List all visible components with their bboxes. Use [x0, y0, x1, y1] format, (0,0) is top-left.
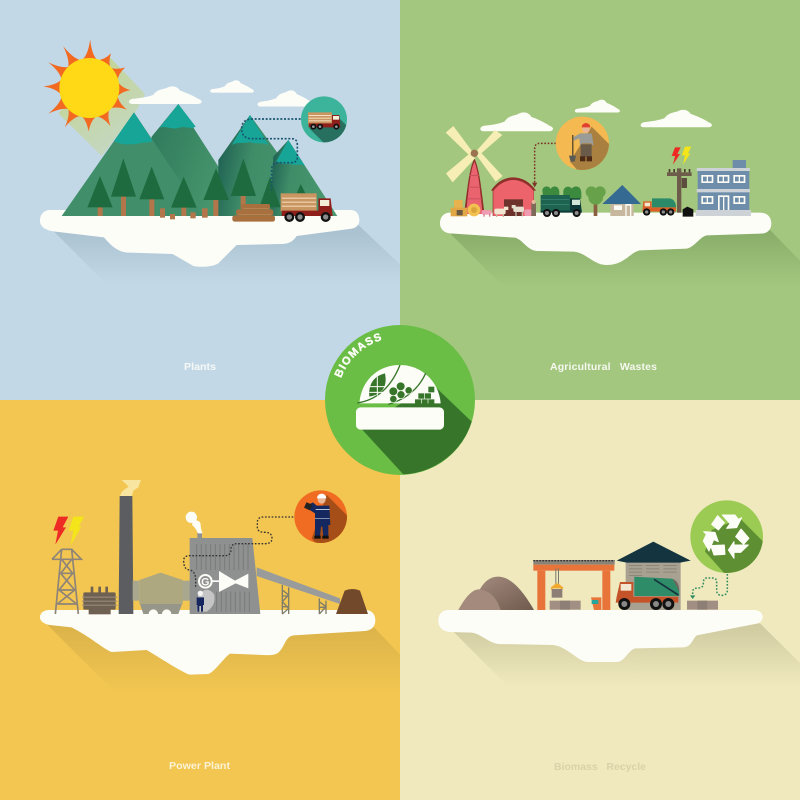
sun: [43, 39, 131, 132]
icon: farmer badge: [556, 116, 609, 170]
island: biomass recycle: [438, 610, 763, 662]
mountain range: [62, 104, 337, 216]
forest trees: [87, 158, 305, 219]
label: power plant: Power Plant: [169, 760, 230, 772]
log truck: [281, 193, 333, 222]
island: plants: [40, 210, 359, 267]
panel: power plant: [0, 400, 400, 800]
island shadow: power plant: [47, 624, 530, 790]
icon: worker badge: [294, 490, 347, 543]
icon: truck badge: [301, 96, 347, 142]
clouds: plants: [129, 80, 314, 106]
dotted route: recycle: [693, 574, 727, 595]
transformer: [82, 587, 117, 614]
panel background: power plant: [0, 400, 400, 800]
sun shadow: [58, 57, 145, 156]
dotted route: agricultural wastes: [535, 143, 556, 184]
island: agricultural wastes: [440, 213, 771, 265]
island: power plant: [40, 610, 375, 675]
small worker: [197, 591, 204, 612]
center badge: biomass: [325, 325, 475, 475]
panel background: biomass recycle: [400, 400, 800, 800]
hay and wheel: [451, 200, 480, 216]
chimney with smoke: [119, 480, 141, 614]
panel: biomass recycle: [400, 400, 800, 800]
label: biomass recycle: Biomass Recycle: [554, 761, 646, 773]
boiler unit: [133, 573, 190, 614]
garbage truck: [642, 198, 676, 216]
dotted route: plants: [242, 119, 301, 192]
conveyor belt: [257, 567, 340, 614]
utility pole: [667, 168, 692, 213]
stacked blocks: [550, 601, 581, 610]
badge dome icon: [356, 365, 444, 430]
generator and turbine: G: [201, 576, 209, 588]
panel: agricultural wastes: [400, 0, 800, 400]
log pile: [232, 204, 275, 222]
green cargo truck: [541, 195, 582, 217]
biomass fuel heap: [336, 589, 368, 614]
icon: route arrowhead: [690, 595, 695, 599]
panel: plants: [0, 0, 400, 400]
island shadow: biomass recycle: [453, 623, 800, 785]
biomass mound: [458, 577, 534, 610]
island shadow: agricultural wastes: [450, 230, 800, 387]
small cart: [591, 597, 601, 610]
windmill: [446, 126, 503, 214]
icon: lightning bolts: [672, 147, 691, 165]
island shadow: plants: [53, 225, 523, 381]
label: agricultural wastes: Agricultural Wastes: [550, 361, 657, 373]
bushes: [542, 186, 581, 199]
garbage bag: [683, 207, 693, 217]
dotted route: power plant: [184, 517, 293, 588]
badge long shadow: [362, 383, 472, 474]
label: plants: Plants: [184, 361, 216, 373]
tree: [586, 186, 606, 216]
farm animals: [482, 200, 536, 217]
power station building: [186, 512, 260, 614]
barn: [491, 177, 536, 216]
gantry crane: [533, 560, 615, 610]
garbage truck: recycle: [616, 577, 679, 610]
icon: recycle badge: [690, 500, 763, 573]
generator and turbine: [198, 571, 248, 592]
warehouse: [617, 542, 691, 610]
house: [602, 185, 641, 216]
destination blocks: [687, 601, 718, 610]
panel background: plants: [0, 0, 400, 400]
icon: lightning bolts: [53, 517, 84, 545]
transmission tower: [52, 549, 81, 614]
badge title: BIOMASS: [334, 333, 382, 378]
badge circle: [325, 325, 475, 475]
clouds: agricultural wastes: [480, 100, 712, 131]
icon: route arrowhead: [532, 183, 537, 187]
office building: [696, 160, 751, 216]
panel background: agricultural wastes: [400, 0, 800, 400]
